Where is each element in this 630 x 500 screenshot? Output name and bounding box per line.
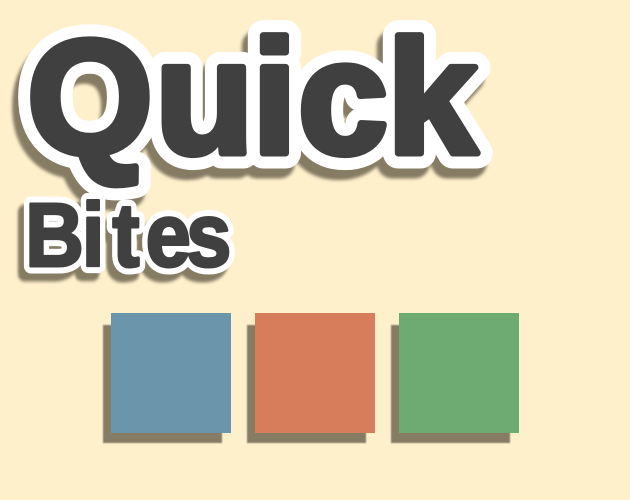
panel: orange square: [247, 313, 375, 443]
subtitle: Bites: Bites: [19, 193, 225, 294]
title: Quick: Quick: [21, 17, 472, 198]
panel: blue square: [103, 313, 231, 443]
subtitle: Bites: Bites: [25, 185, 231, 286]
title: Quick: Quick: [27, 7, 478, 188]
subtitle: Bites: Bites: [25, 185, 231, 286]
title: Quick: Quick: [27, 7, 478, 188]
panel: green square: [391, 313, 519, 443]
